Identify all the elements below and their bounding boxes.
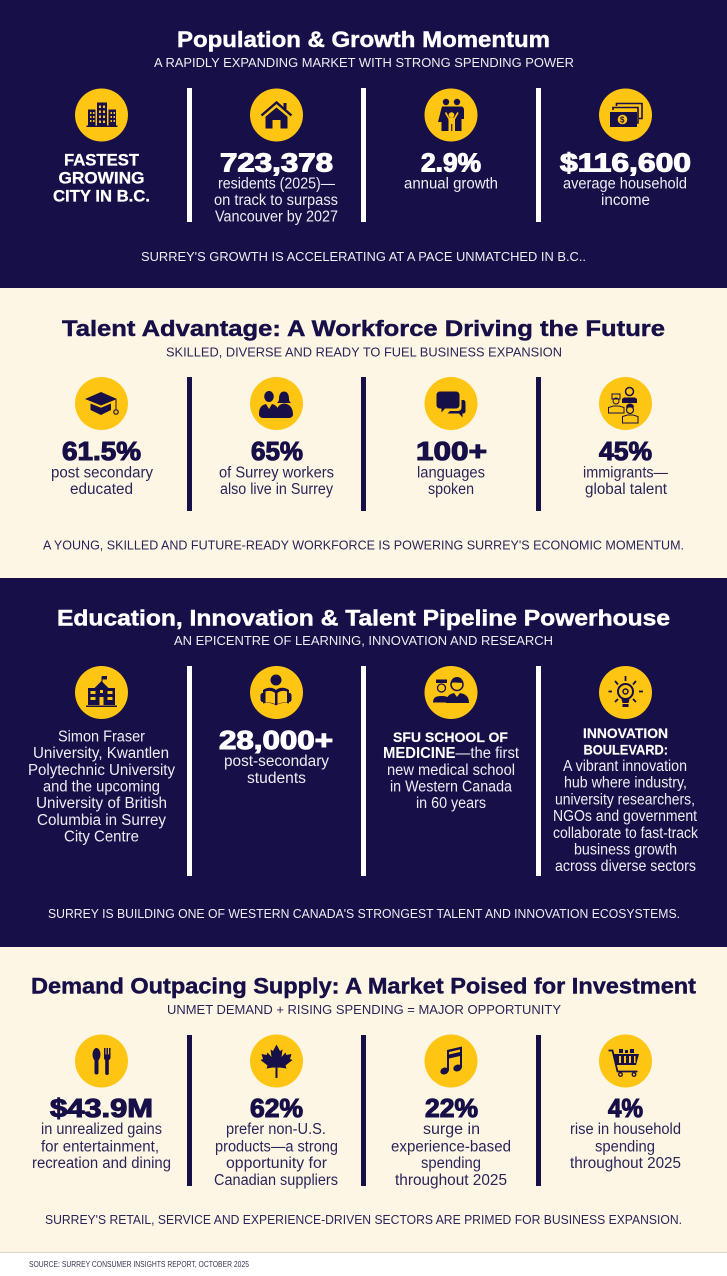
stat: post secondary educated: post secondary <box>51 464 153 482</box>
stat: non-U.S. products: prefer non-U.S. <box>226 1121 326 1138</box>
stat: workers live in Surrey <box>219 436 334 498</box>
text: innovation boulevard: INNOVATION <box>583 725 668 741</box>
subheading: demand: UNMET DEMAND + RISING SPENDING = MAJOR OPPORTUNITY <box>167 1002 561 1017</box>
text: universities: University of British <box>36 795 167 812</box>
icon: speech bubbles <box>424 377 478 430</box>
text: innovation boulevard: business growth <box>574 842 677 858</box>
heading: talent: Talent Advantage: A Workforce Driving the Future <box>62 316 665 341</box>
stat: residents <box>214 148 338 226</box>
stat: languages: spoken <box>428 481 474 498</box>
text: SFU school of medicine: in 60 years <box>416 795 486 812</box>
stat: annual growth: 2.9% <box>421 148 481 178</box>
stat: experience-based spending: experience-based <box>391 1138 511 1156</box>
icon: music notes <box>424 1034 478 1088</box>
stat: household spending: throughout 2025 <box>570 1155 681 1172</box>
text: SFU school of medicine: new medical school <box>387 762 515 779</box>
icon: graduation cap <box>75 377 128 430</box>
stat: post secondary educated: educated <box>70 481 133 498</box>
text: universities: Polytechnic University <box>28 762 175 779</box>
icon: medical professionals <box>424 666 478 719</box>
stat: household income: $116,600 <box>560 148 691 178</box>
stat: household spending: rise in household <box>570 1121 681 1138</box>
stat: immigrants: immigrants— <box>583 464 668 482</box>
stat: post secondary educated <box>51 436 153 498</box>
icon: family <box>424 88 478 142</box>
text: innovation boulevard: across diverse sectors <box>555 858 696 875</box>
icon: house <box>250 88 303 142</box>
text: innovation boulevard: BOULEVARD: <box>584 742 668 758</box>
panel: population and growth momentum <box>0 0 727 288</box>
heading: education: Education, Innovation & Talent Pipeline Powerhouse <box>57 606 670 630</box>
icon: global professionals <box>599 377 652 430</box>
stat: residents: on track to surpass <box>214 192 338 209</box>
stat: immigrants: 45% <box>599 436 652 466</box>
text: universities <box>28 728 175 846</box>
text: innovation boulevard <box>553 725 698 875</box>
stat: residents: residents (2025)— <box>218 176 335 192</box>
stat: workers live in Surrey: 65% <box>251 436 303 466</box>
text: SFU school of medicine <box>383 729 520 812</box>
stat: fastest growing city: FASTEST <box>64 152 139 170</box>
text: universities: Simon Fraser <box>58 728 145 746</box>
takeaway: population: SURREY'S GROWTH IS ACCELERATING AT A PACE UNMATCHED IN B.C.. <box>141 249 586 264</box>
stat: unrealized gains: recreation and dining <box>32 1155 171 1172</box>
stat: post-secondary students: post-secondary <box>224 753 329 770</box>
icon: reader <box>250 666 303 719</box>
icon: banknotes <box>599 88 652 142</box>
icon: city buildings <box>75 88 128 142</box>
stat: experience-based spending: 22% <box>425 1093 478 1123</box>
stat: unrealized gains: in unrealized gains <box>41 1121 162 1138</box>
text: innovation boulevard: collaborate to fast-track <box>553 825 698 842</box>
stat: workers live in Surrey: of Surrey workers <box>219 464 334 482</box>
icon: spoon and fork <box>75 1034 128 1088</box>
takeaway: education: SURREY IS BUILDING ONE OF WESTERN CANADA'S STRONGEST TALENT AND INNOVATION ECOSYSTEMS. <box>48 906 680 921</box>
text: innovation boulevard: university researchers, <box>555 792 695 808</box>
subheading: population: A RAPIDLY EXPANDING MARKET WITH STRONG SPENDING POWER <box>154 55 574 70</box>
stat: post secondary educated: 61.5% <box>62 436 141 466</box>
stat: fastest growing city: GROWING <box>58 170 144 188</box>
stat: fastest growing city: CITY IN B.C. <box>53 188 150 206</box>
stat: household income: income <box>601 192 650 209</box>
text: innovation boulevard: A vibrant innovation <box>563 758 687 775</box>
stat: immigrants: global talent <box>585 481 668 498</box>
stat: unrealized gains: for entertainment, <box>41 1138 159 1156</box>
stat: unrealized gains: $43.9M <box>50 1093 153 1123</box>
icon: maple leaf <box>250 1034 303 1088</box>
stat: experience-based spending: surge in <box>423 1121 480 1138</box>
stat: household spending <box>570 1093 681 1172</box>
source footnote: SOURCE: SURREY CONSUMER INSIGHTS REPORT, OCTOBER 2025 <box>29 1260 249 1269</box>
stat: residents: Vancouver by 2027 <box>215 208 338 226</box>
stat: fastest growing city <box>53 152 150 206</box>
stat: experience-based spending: throughout 2025 <box>395 1172 507 1189</box>
stat: immigrants <box>583 436 668 498</box>
stat: post-secondary students <box>219 725 333 787</box>
heading: demand: Demand Outpacing Supply: A Market Poised for Investment <box>31 974 697 998</box>
icon: light bulb <box>599 666 652 719</box>
icon: shopping cart <box>599 1034 652 1088</box>
panel: demand outpacing supply <box>0 947 727 1252</box>
stat: languages: languages <box>417 464 485 482</box>
icon: university building <box>75 666 128 719</box>
stat: languages: 100+ <box>416 436 487 466</box>
stat: non-U.S. products: 62% <box>250 1093 303 1123</box>
stat: non-U.S. products: opportunity for <box>226 1155 327 1172</box>
subheading: talent: SKILLED, DIVERSE AND READY TO FUEL BUSINESS EXPANSION <box>166 344 562 360</box>
stat: experience-based spending <box>391 1093 511 1189</box>
takeaway: demand: SURREY'S RETAIL, SERVICE AND EXPERIENCE-DRIVEN SECTORS ARE PRIMED FOR BUSINESS EXPANSION. <box>45 1212 682 1227</box>
text: SFU school of medicine: SFU SCHOOL OF <box>393 729 508 745</box>
takeaway: talent: A YOUNG, SKILLED AND FUTURE-READY WORKFORCE IS POWERING SURREY'S ECONOMIC MOMENTUM. <box>43 538 684 552</box>
stat: languages <box>416 436 487 498</box>
stat: household income <box>560 148 691 209</box>
text: innovation boulevard: NGOs and government <box>553 808 698 825</box>
stat: non-U.S. products <box>214 1093 338 1189</box>
text: universities: Columbia in Surrey <box>37 812 166 829</box>
stat: non-U.S. products: Canadian suppliers <box>214 1172 338 1189</box>
text: innovation boulevard: hub where industry, <box>564 774 687 792</box>
stat: non-U.S. products: products—a strong <box>215 1138 338 1156</box>
icon: banknotes: $ <box>620 116 625 124</box>
stat: unrealized gains <box>32 1093 171 1172</box>
stat: workers live in Surrey: also live in Surrey <box>220 481 333 498</box>
icon: workers <box>250 377 303 430</box>
heading: population: Population & Growth Momentum <box>177 27 550 52</box>
stat: experience-based spending: spending <box>421 1155 481 1172</box>
stat: residents: 723,378 <box>220 148 333 178</box>
text: universities: City Centre <box>64 828 139 846</box>
panel: talent advantage <box>0 288 727 578</box>
stat: post-secondary students: students <box>247 770 306 787</box>
panel: education and innovation <box>0 578 727 947</box>
text: universities: University, Kwantlen <box>33 745 169 762</box>
text: SFU school of medicine: MEDICINE—the first <box>383 745 520 762</box>
stat: household spending: 4% <box>608 1093 643 1123</box>
subheading: education: AN EPICENTRE OF LEARNING, INNOVATION AND RESEARCH <box>174 633 553 648</box>
stat: annual growth: annual growth <box>404 176 498 192</box>
text: universities: and the upcoming <box>43 778 160 796</box>
stat: annual growth <box>404 148 498 192</box>
stat: post-secondary students: 28,000+ <box>219 725 333 755</box>
stat: household spending: spending <box>595 1138 655 1156</box>
stat: household income: average household <box>563 176 687 192</box>
text: SFU school of medicine: in Western Canada <box>390 778 512 796</box>
